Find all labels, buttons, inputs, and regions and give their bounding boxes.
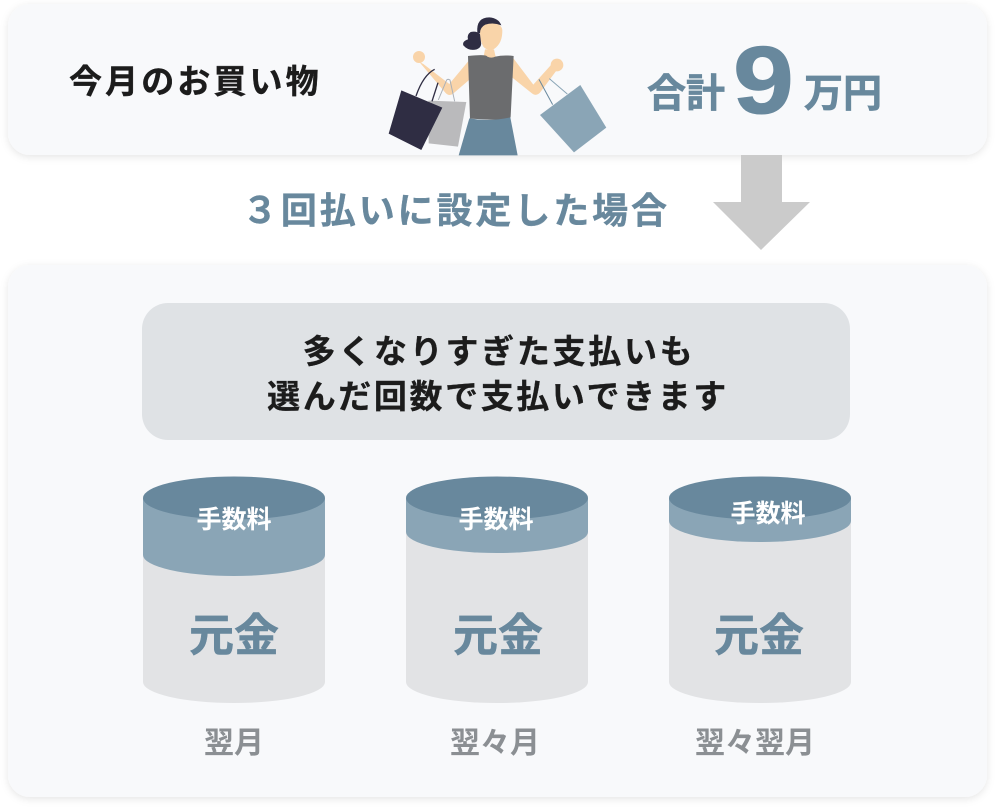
cylinder: month after next: 元金 <box>453 610 543 661</box>
cylinder: two months after next: 翌々翌月 <box>695 727 815 760</box>
callout: 選んだ回数で支払いできます <box>267 378 729 415</box>
cylinder: next month: 元金 <box>189 610 279 661</box>
cylinder: two months after next: 元金 <box>714 610 804 661</box>
total label <box>647 26 882 134</box>
heading: this month's purchases: 今月のお買い物 <box>69 63 322 100</box>
callout <box>142 303 850 440</box>
cylinder: next month <box>143 476 325 760</box>
callout: 多くなりすぎた支払いも <box>303 333 695 370</box>
total label: 9 <box>733 26 794 134</box>
arrow <box>713 155 810 250</box>
cylinder: two months after next: 手数料 <box>730 500 806 528</box>
cylinder: month after next <box>406 476 588 760</box>
cylinder: next month: 翌月 <box>204 727 264 760</box>
total label: 万円 <box>804 73 882 116</box>
cylinder: month after next: 翌々月 <box>450 727 540 760</box>
panel: this month's purchases <box>8 4 987 155</box>
heading: three installment setting: ３回払いに設定した場合 <box>242 190 670 231</box>
icon: shopper with bags <box>389 17 606 155</box>
cylinder: two months after next <box>669 476 851 760</box>
total label: 合計 <box>647 73 725 116</box>
cylinder: next month: 手数料 <box>196 506 272 534</box>
panel: installment explanation <box>8 265 987 797</box>
cylinder: month after next: 手数料 <box>458 506 534 534</box>
